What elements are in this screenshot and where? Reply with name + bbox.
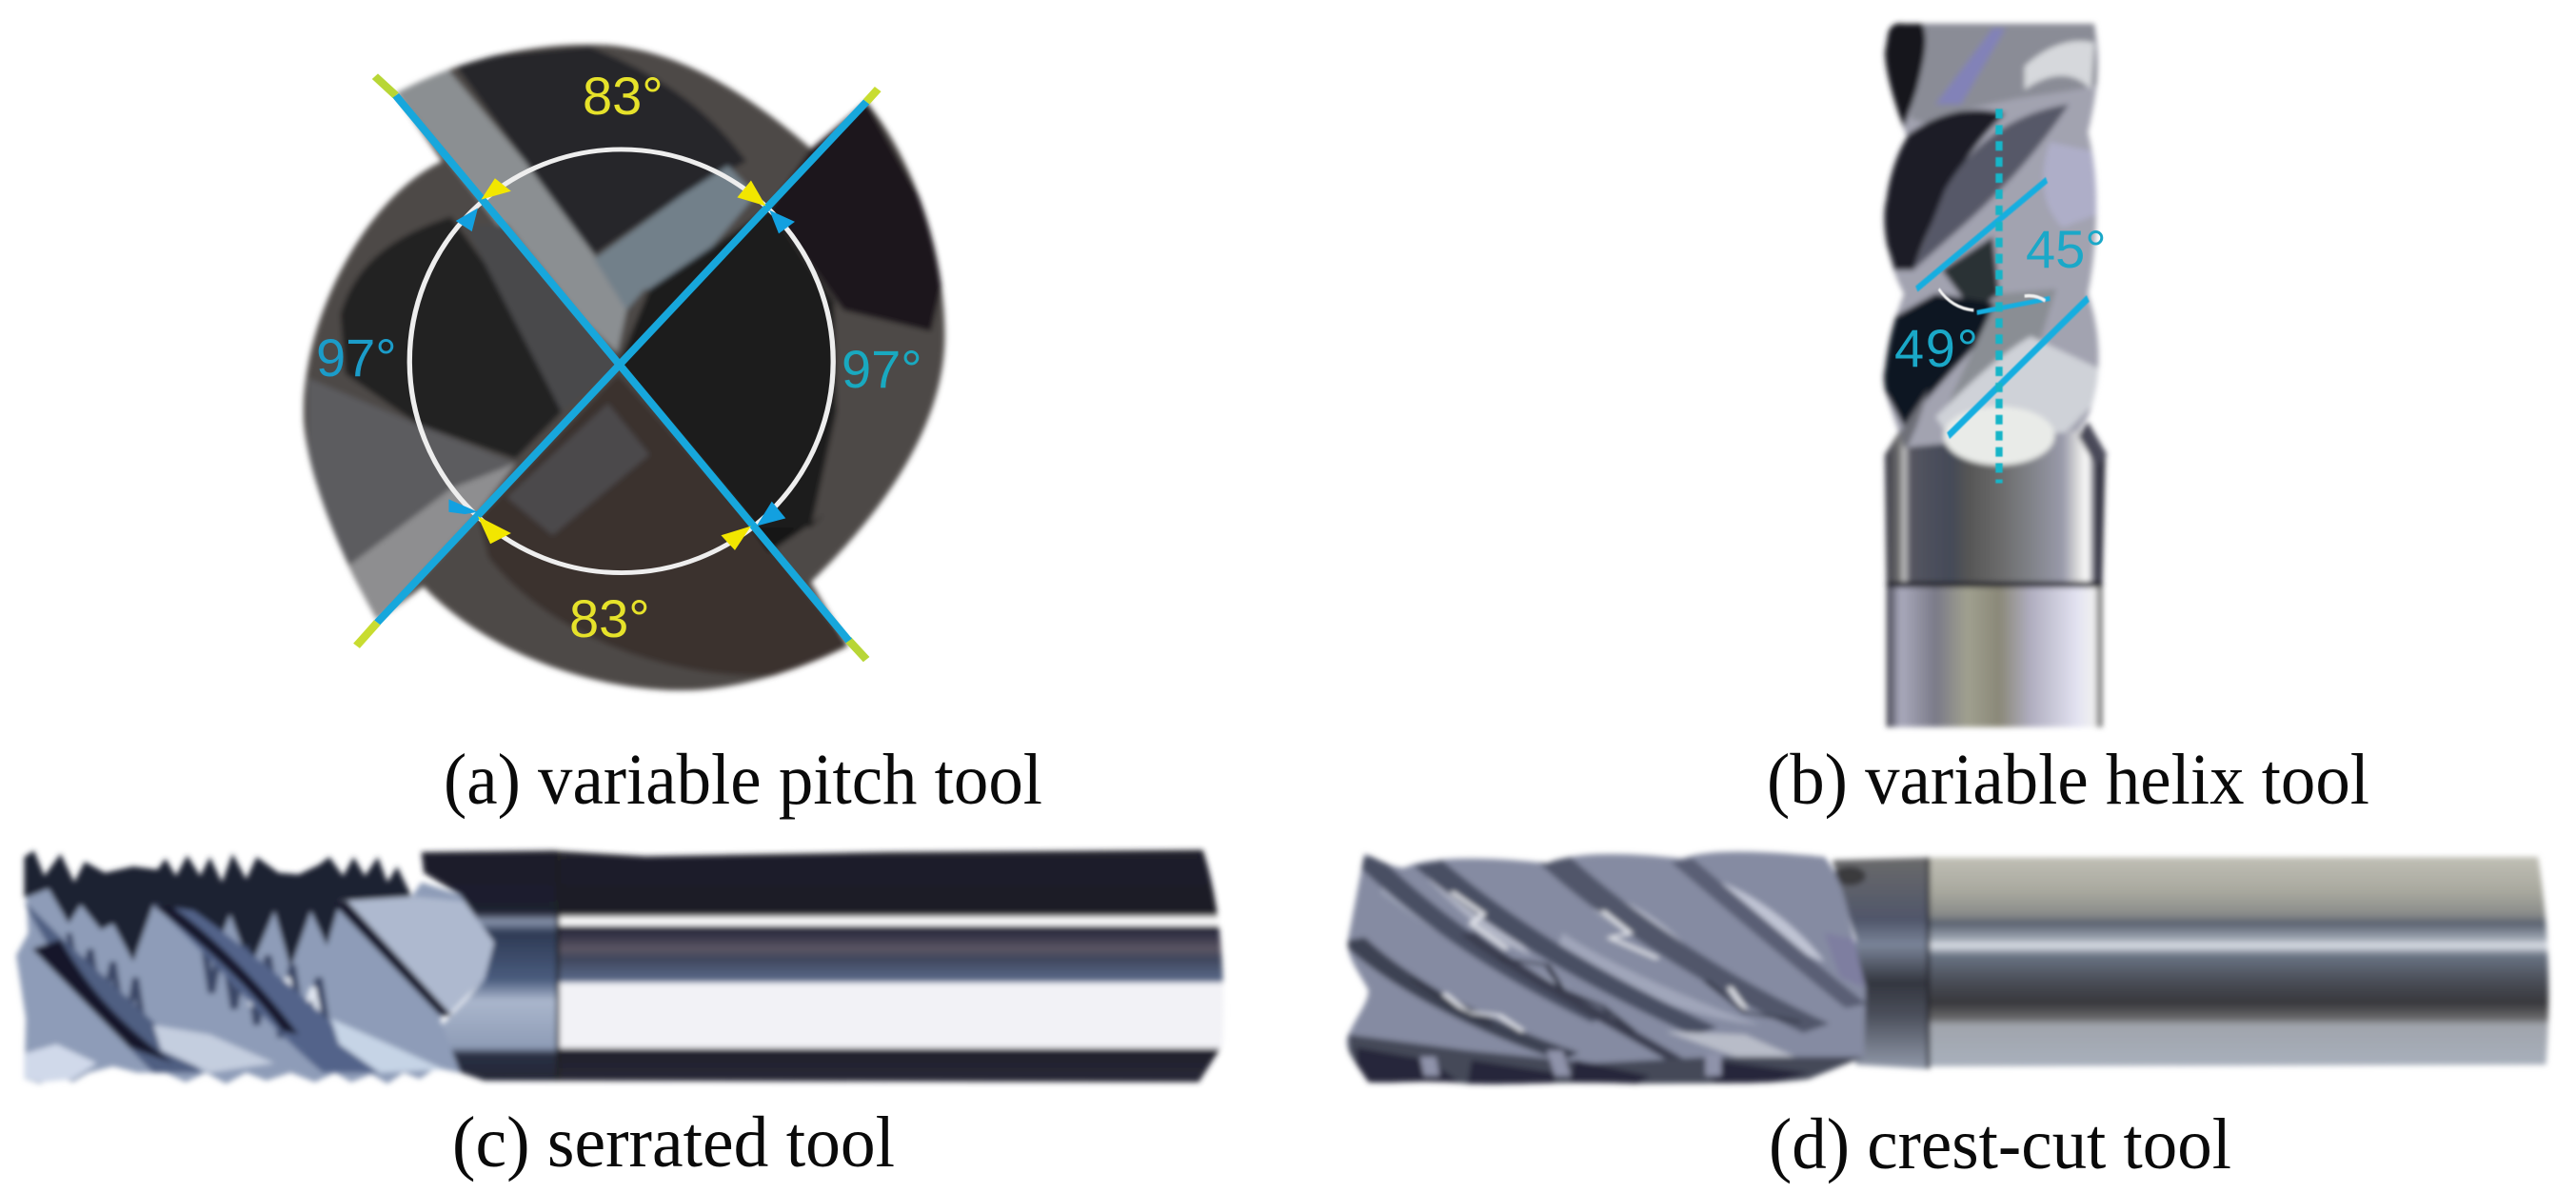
neck xyxy=(422,850,557,1081)
panel: serrated tool xyxy=(16,850,1223,1084)
caption: variable helix tool: (b) variable helix tool xyxy=(1767,740,2369,820)
panel: crest-cut tool xyxy=(1333,841,2548,1088)
angle lines xyxy=(1916,109,2088,483)
label: 49 degrees: 49° xyxy=(1894,318,1978,378)
neck xyxy=(1833,858,1929,1069)
label: 83 degrees top: 83° xyxy=(583,66,664,126)
photo: helix tool body and shank xyxy=(1878,14,2107,727)
panel: variable pitch tool end view xyxy=(299,40,949,695)
label: 45 degrees: 45° xyxy=(2026,219,2107,279)
shank xyxy=(1929,857,2548,1066)
label: 83 degrees bottom: 83° xyxy=(569,588,650,648)
caption: crest-cut tool: (d) crest-cut tool xyxy=(1769,1104,2231,1184)
serrated flutes xyxy=(16,850,494,1084)
caption: serrated tool: (c) serrated tool xyxy=(452,1103,895,1183)
label: 97 degrees left: 97° xyxy=(316,328,397,388)
panel: variable helix tool xyxy=(1878,14,2107,727)
shank xyxy=(485,850,1223,1083)
reference lines and angle arcs xyxy=(357,76,878,660)
caption: variable pitch tool: (a) variable pitch tool xyxy=(444,740,1042,820)
label: 97 degrees right: 97° xyxy=(842,339,922,399)
photo: tool end face xyxy=(299,40,949,695)
crest-cut flutes xyxy=(1333,841,1888,1088)
